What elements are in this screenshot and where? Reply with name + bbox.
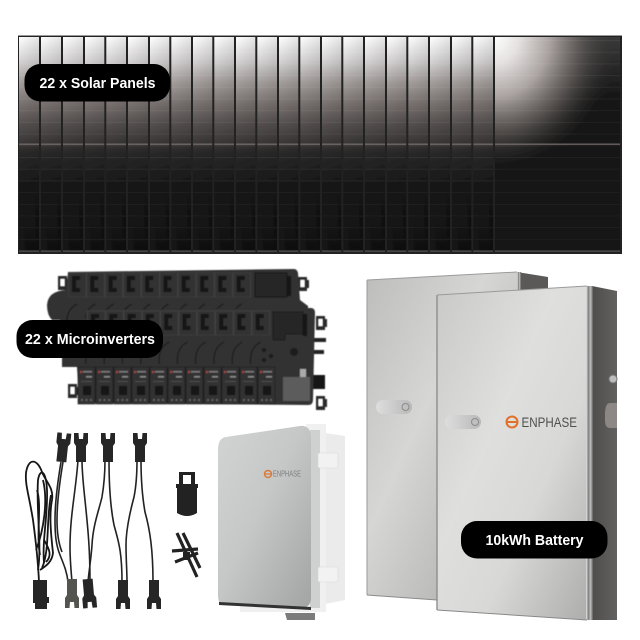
coiled cable (26, 462, 53, 582)
front row of microinverters (62, 308, 327, 410)
small enphase logo (264, 470, 301, 478)
back row of microinverters (47, 269, 309, 345)
label: 22 x Microinverters (16, 320, 163, 358)
side recess (605, 403, 617, 428)
solar panels array (18, 35, 622, 254)
label: 10kWh Battery: 10kWh Battery (486, 533, 584, 549)
IQ battery enclosure (218, 424, 345, 620)
label: 22 x Solar Panels: 22 x Solar Panels (40, 76, 156, 92)
lower hinge (318, 567, 338, 582)
connectors (33, 432, 161, 609)
upper hinge (318, 453, 338, 468)
microinverters (47, 269, 327, 410)
cable assembly (26, 432, 161, 609)
enphase logo (506, 415, 577, 430)
frame (240, 424, 326, 612)
end cap (176, 472, 198, 516)
back box (325, 433, 345, 604)
front battery handle (445, 415, 481, 429)
wide solar panel with glare (495, 37, 620, 252)
back battery handle (376, 400, 412, 414)
small enphase logo: ENPHASE (273, 470, 301, 478)
back battery (367, 272, 548, 600)
narrow solar panels (19, 37, 493, 252)
side button (609, 375, 617, 383)
label: 22 x Solar Panels (24, 64, 170, 102)
disconnect tool (172, 533, 200, 577)
bottom clip (285, 613, 315, 620)
enphase logo: ENPHASE (522, 415, 577, 430)
door panel (218, 426, 311, 608)
label: 10kWh Battery (461, 521, 608, 558)
trunk cables (55, 460, 153, 582)
front battery (437, 286, 617, 620)
label: 22 x Microinverters: 22 x Microinverters (25, 332, 155, 348)
